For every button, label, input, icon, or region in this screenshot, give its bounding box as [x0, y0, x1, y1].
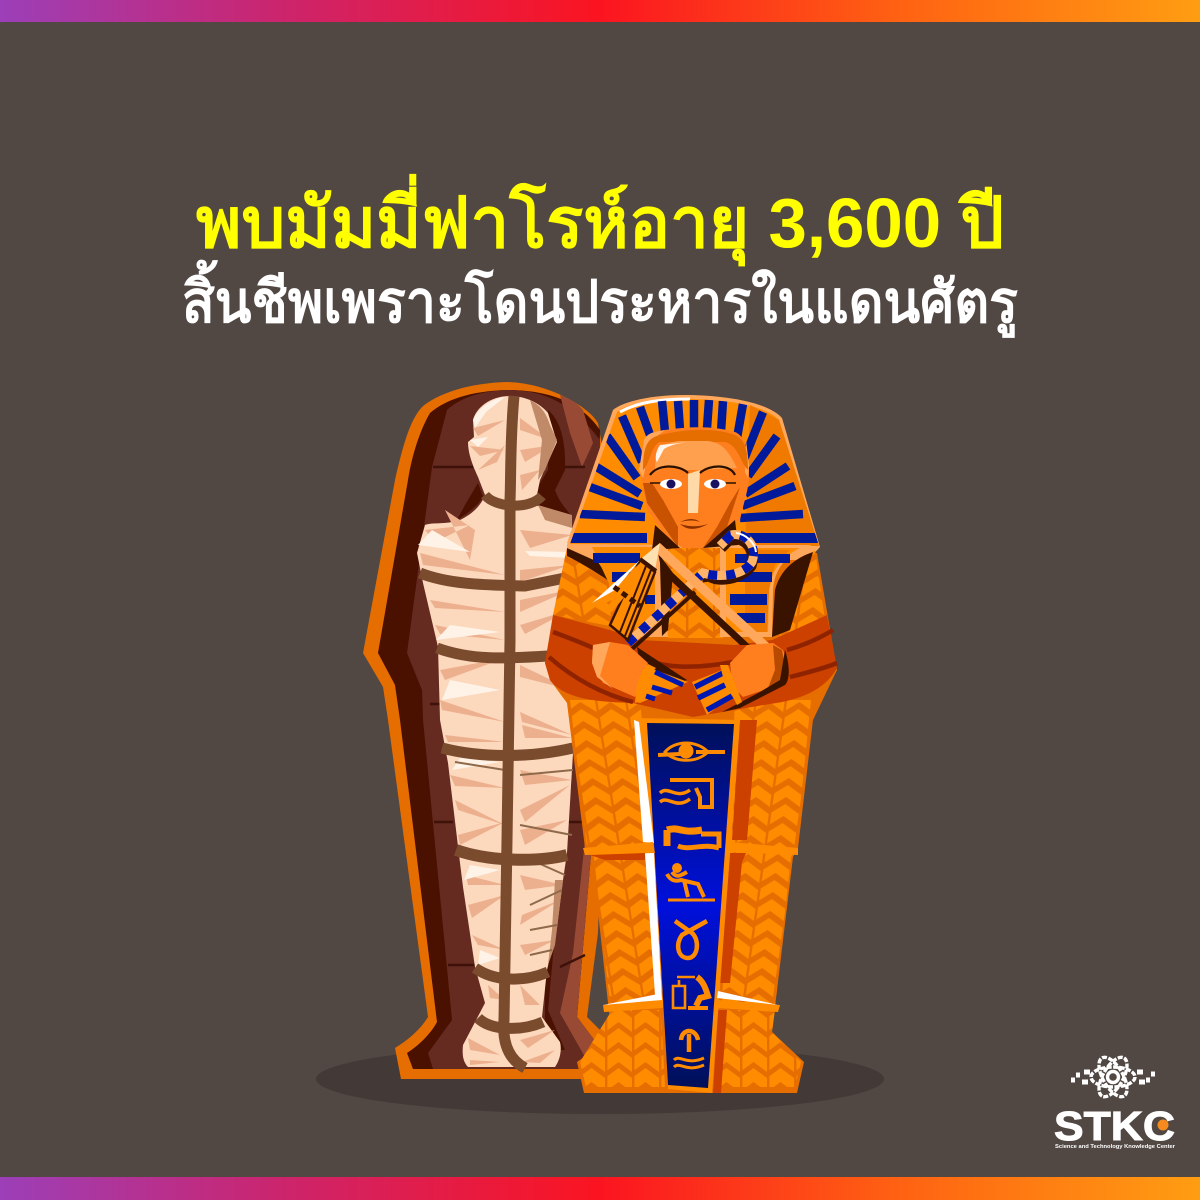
shaded side: [530, 400, 572, 965]
icon: atom: [1071, 1053, 1155, 1101]
highlights: [418, 397, 572, 965]
logo: STKC: [1054, 1053, 1176, 1150]
right shoulder chevrons: [780, 550, 825, 636]
subheadline: สิ้นชีพเพราะโดนประหารในแดนศัตรู: [182, 260, 1018, 338]
inscription panel: [634, 718, 757, 1093]
arm band: [545, 615, 837, 717]
hands and bracelets: [592, 642, 789, 715]
left leg chevrons: [570, 700, 668, 1003]
wrapping bands: [420, 396, 575, 1068]
left shoulder trim and shadow: [567, 544, 616, 590]
ground shadow: [316, 1044, 884, 1114]
right lappet: [720, 545, 812, 637]
feet chevrons: [580, 1010, 801, 1087]
wordmark: STKC: [1054, 1103, 1175, 1149]
flail: [592, 543, 773, 649]
crook: [628, 533, 756, 649]
headdress: [567, 395, 820, 560]
tagline: Science and Technology Knowledge Center: [1055, 1144, 1176, 1150]
peach wrap folds: [420, 418, 572, 1065]
illustration: mummy: [417, 396, 575, 1068]
icon: orange dot: [1158, 1120, 1168, 1130]
face: [639, 427, 749, 550]
lappets and chest: [553, 544, 825, 638]
hieroglyphs: [658, 743, 725, 1068]
bottom gradient bar: [0, 1177, 1200, 1200]
left shoulder chevrons: [553, 552, 612, 626]
illustration: open coffin: [363, 382, 612, 1079]
right leg chevrons: [722, 700, 811, 1005]
knee and ankle bands: [583, 842, 798, 1012]
illustration: sarcophagus: [545, 395, 837, 1093]
top gradient bar: [0, 0, 1200, 22]
left lappet: [592, 547, 665, 637]
chest chevrons: [668, 548, 723, 638]
title: [182, 173, 1018, 338]
headline: พบมัมมี่ฟาโรห์อายุ 3,600 ปี: [196, 173, 1004, 267]
body base: [545, 548, 837, 1093]
